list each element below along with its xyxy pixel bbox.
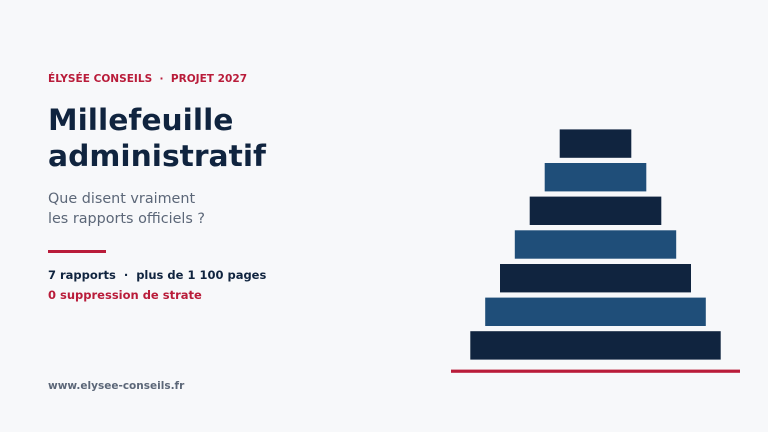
subtitle: Que disent vraiment [48,190,195,206]
layer 5 [500,264,691,292]
layer 4 [515,230,676,259]
website: www.elysee-conseils.fr [48,380,184,392]
layer 6 [485,298,706,326]
title: administratif [48,139,266,174]
layer 1 [560,129,631,158]
accent rule [48,250,106,252]
key figures: 7 rapports · plus de 1 100 pages [48,268,266,282]
subtitle [48,190,205,227]
highlight figure: 0 suppression de strate [48,288,202,302]
layer 2 [545,163,646,191]
layer 7 [470,331,721,360]
title [48,103,266,174]
subtitle: les rapports officiels ? [48,211,205,227]
title: Millefeuille [48,103,233,138]
eyebrow: brand and project: ÉLYSÉE CONSEILS · PROJET 2027 [48,73,247,85]
layer 3 [530,197,661,225]
base line [451,370,740,373]
